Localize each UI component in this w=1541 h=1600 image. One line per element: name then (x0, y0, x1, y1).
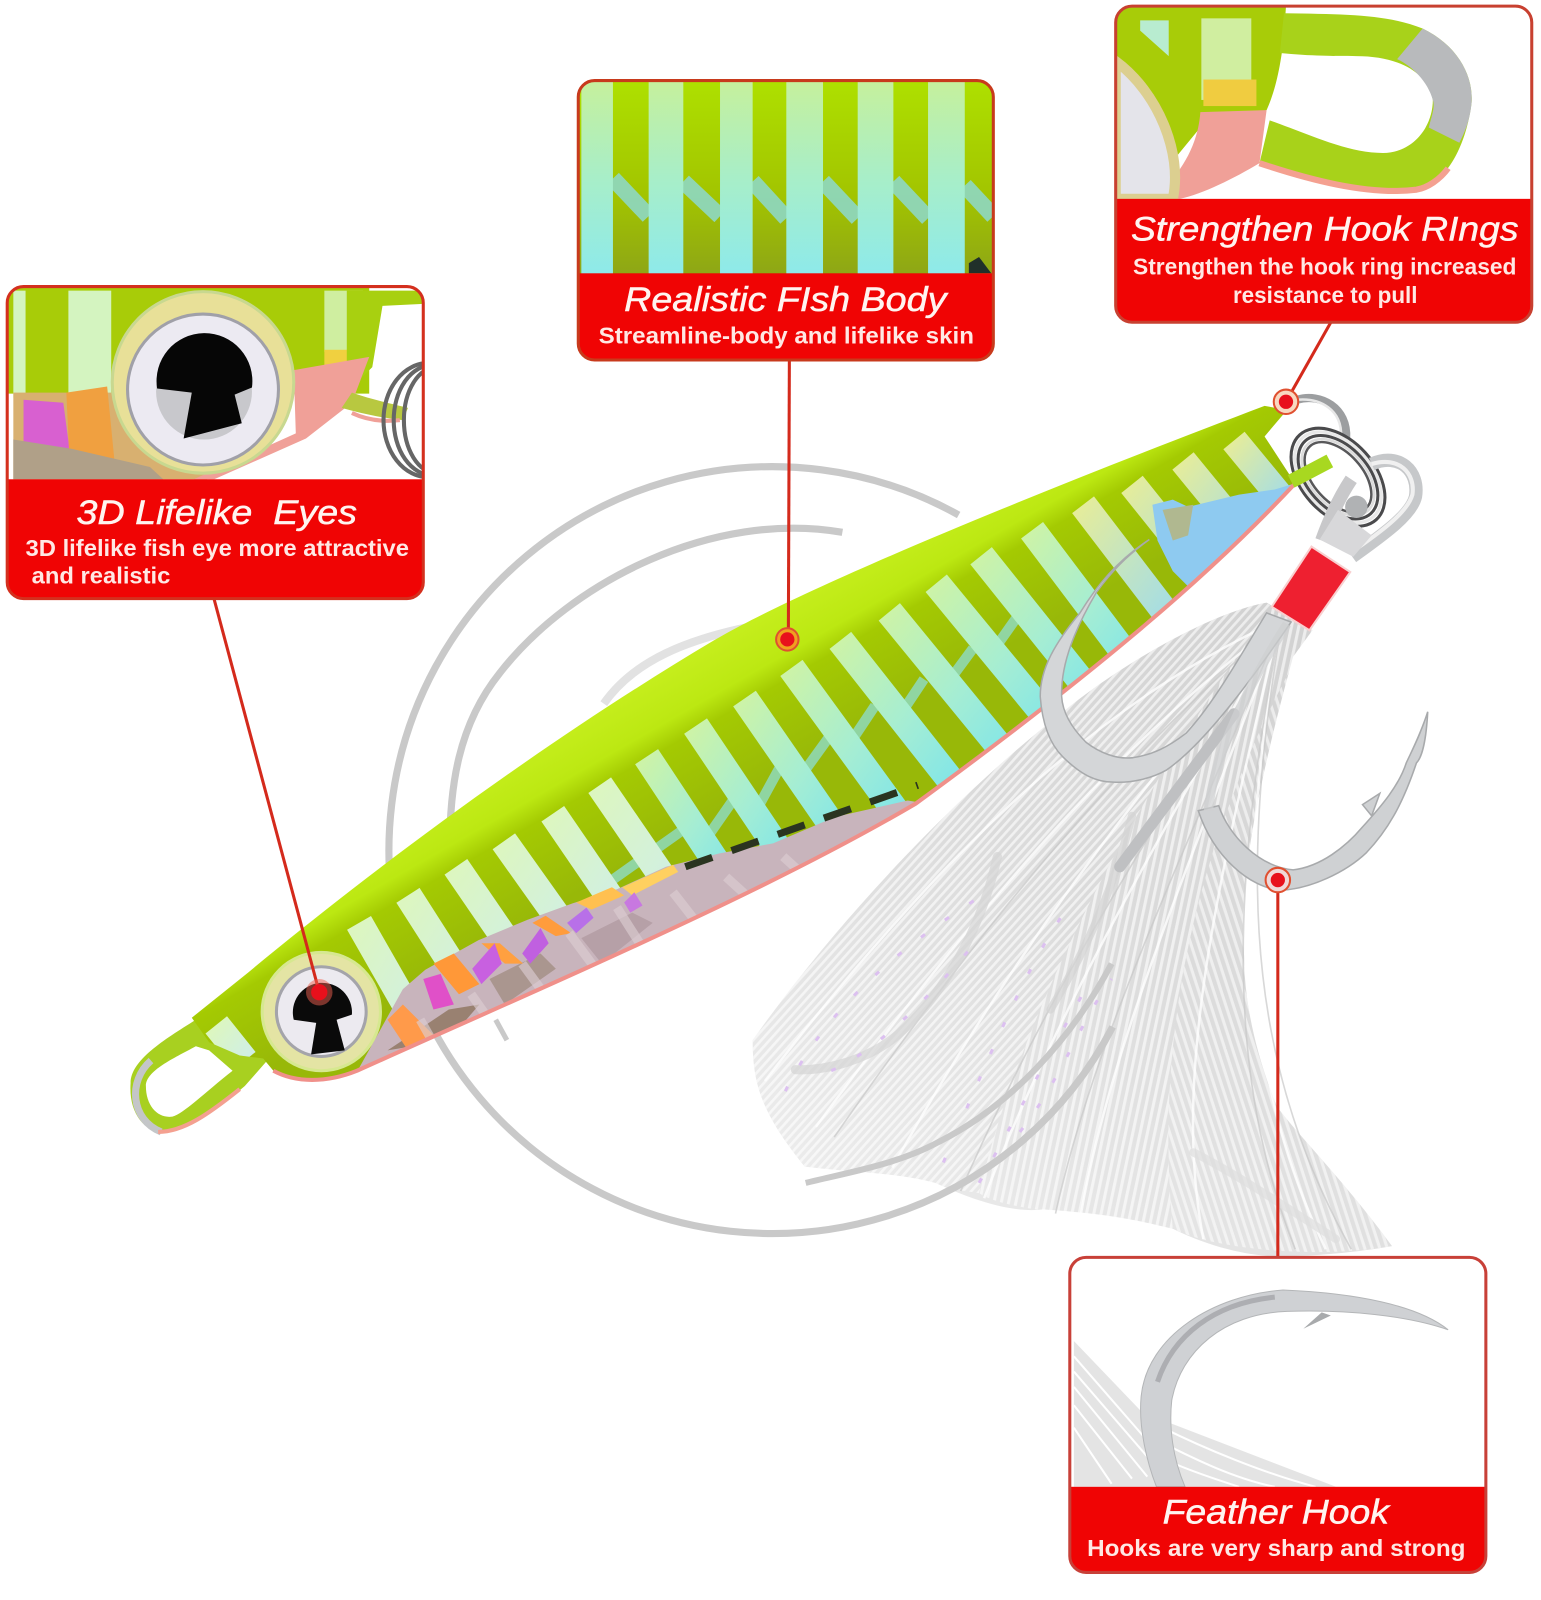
hook: left point (1040, 539, 1291, 782)
heading: Feather Hook (1163, 1494, 1391, 1532)
body stripes (216, 441, 1295, 1081)
diagonal reflections (613, 178, 993, 218)
lure: fish body (130, 406, 1295, 1133)
marker dot: hook ring (1274, 390, 1298, 414)
nose ring (130, 1020, 267, 1133)
feather detail (1074, 1341, 1336, 1487)
split rings and hook eye (1273, 398, 1416, 557)
blue holographic patch (1152, 483, 1295, 591)
heading: 3D Lifelike Eyes (77, 494, 357, 532)
silver belly (352, 801, 938, 1081)
marker dot: eye (306, 979, 333, 1005)
heading: Strengthen Hook RIngs (1131, 211, 1518, 249)
leader lines (214, 322, 1331, 1257)
description: 3D lifelike fish eye more attractive (26, 535, 409, 561)
belly pink edge (273, 483, 1295, 1080)
hook: back point (1120, 714, 1234, 867)
dark speckle along belly edge (685, 785, 918, 867)
pink speckles (785, 897, 1112, 1183)
zoomed eye (112, 292, 294, 473)
marker dot: feather hook (1266, 868, 1290, 892)
description: Streamline-body and lifelike skin (599, 323, 974, 349)
red thread wrap (1272, 547, 1350, 630)
panel: strengthen hook rings (1116, 6, 1532, 322)
description (1133, 253, 1516, 308)
description: Strengthen the hook ring increased (1133, 253, 1516, 279)
description (26, 535, 409, 588)
panel: realistic fish body (578, 81, 993, 360)
background logo circles (389, 467, 1113, 1234)
feather tail (753, 603, 1392, 1256)
description: and realistic (32, 562, 170, 588)
marker dot: body (776, 628, 799, 651)
soft quill bands (795, 816, 1336, 1239)
eye (262, 952, 380, 1071)
hook: rear shank into feather (1208, 624, 1287, 811)
panel: 3D lifelike eyes (7, 287, 473, 599)
description: resistance to pull (1233, 282, 1418, 308)
mottled belly patches (388, 913, 653, 1050)
split ring detail (381, 362, 422, 479)
zoomed hook ring (1259, 13, 1472, 191)
description: Hooks are very sharp and strong (1087, 1535, 1465, 1561)
panel: feather hook (1070, 1257, 1486, 1572)
rainbow edge (388, 865, 678, 1050)
zoomed hook (1141, 1290, 1448, 1487)
body fill (192, 406, 1295, 1080)
heading: Realistic FIsh Body (624, 281, 949, 319)
hook: right point (1198, 712, 1428, 890)
zoomed body (1117, 8, 1286, 154)
cross reflections (608, 616, 1018, 883)
